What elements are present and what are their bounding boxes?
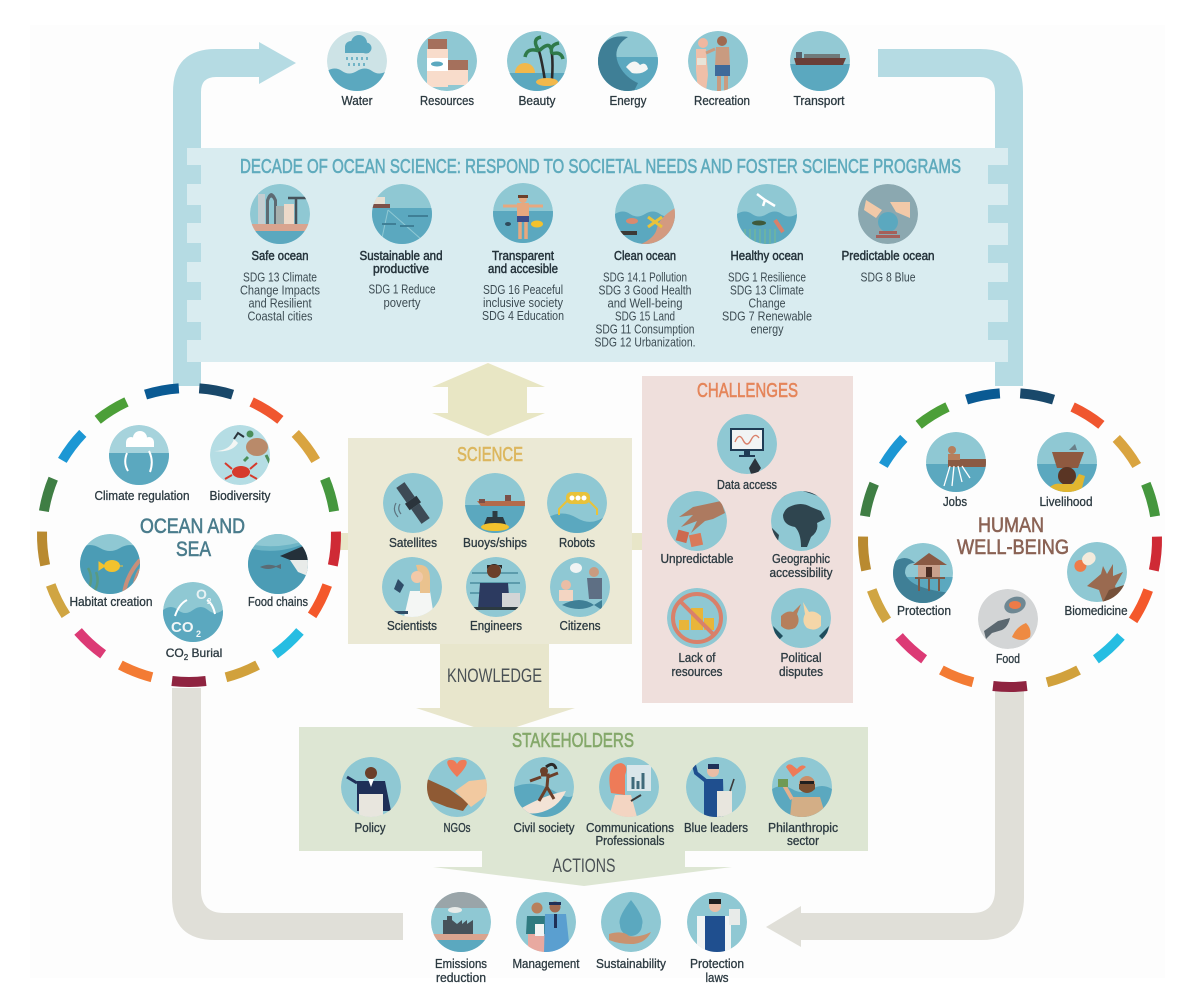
item: safe ocean: Change Impacts — [240, 284, 320, 298]
item: transparent and accessible: SDG 16 Peaceful — [483, 283, 563, 297]
connector: science to challenges — [630, 533, 644, 550]
item: recreation — [688, 31, 750, 108]
arrow: blue loop from benefits down to human well-being — [878, 49, 1023, 386]
item: transport — [790, 31, 850, 108]
item: water — [327, 31, 387, 108]
item: predictable ocean — [842, 184, 935, 284]
item: lack of resources: resources — [672, 665, 722, 679]
item: CO2 burial: 2 — [184, 653, 189, 662]
heading: ocean and sea: OCEAN AND — [140, 515, 245, 538]
item: sustainability — [596, 892, 667, 971]
item: policy — [341, 757, 401, 835]
item: policy: Policy — [354, 821, 386, 835]
item: philanthropic sector: Philanthropic — [768, 821, 838, 835]
arrow: blue loop from ocean up to societal benefits — [173, 42, 296, 386]
item: scientists — [382, 557, 442, 633]
heading: human well-being: HUMAN — [978, 514, 1044, 537]
arrow: grey loop from actions back to ocean — [172, 688, 403, 940]
item: predictable ocean: Predictable ocean — [842, 249, 935, 263]
item: clean ocean: SDG 12 Urbanization. — [594, 336, 696, 350]
item: habitat creation — [70, 534, 153, 609]
item: management — [512, 892, 580, 971]
item: satellites — [383, 473, 443, 550]
item: political disputes — [771, 588, 831, 679]
item: communications professionals: Professionals — [596, 834, 664, 848]
item: clean ocean — [594, 184, 696, 350]
item: food chains: Food chains — [248, 595, 308, 609]
item: water: Water — [342, 94, 372, 108]
label: actions: ACTIONS — [552, 856, 616, 877]
item: safe ocean: SDG 13 Climate — [243, 270, 317, 284]
item: transparent and accessible — [482, 183, 564, 323]
item: protection: Protection — [897, 604, 951, 618]
item: energy: Energy — [610, 94, 647, 108]
item: robots: Robots — [559, 536, 595, 550]
item: biomedicine: Biomedicine — [1064, 604, 1128, 618]
item: climate regulation — [94, 425, 190, 503]
panel: science — [348, 438, 632, 644]
heading: ocean and sea: SEA — [176, 538, 211, 561]
item: sustainable and productive — [360, 184, 443, 310]
item: citizens: Citizens — [560, 619, 600, 633]
item: clean ocean: Clean ocean — [614, 249, 676, 263]
item: CO2 burial: CO — [166, 646, 184, 660]
heading: human well-being — [957, 514, 1069, 559]
heading: stakeholders: STAKEHOLDERS — [512, 730, 634, 752]
item: engineers: Engineers — [470, 619, 522, 633]
item: livelihood — [1037, 432, 1097, 509]
arrow: grey loop from well-being to actions — [766, 690, 1024, 947]
item: buoys/ships: Buoys/ships — [463, 536, 527, 550]
panel: human well-being — [802, 332, 1196, 748]
item: transparent and accessible: and accesible — [488, 262, 558, 276]
item: management: Management — [512, 957, 580, 971]
item: biodiversity — [210, 425, 271, 503]
item: predictable ocean: SDG 8 Blue — [860, 270, 916, 284]
item: geographic accessibility — [770, 491, 833, 580]
item: clean ocean: SDG 15 Land — [615, 310, 675, 324]
item: CO2 burial: O — [196, 586, 207, 602]
item: geographic accessibility: Geographic — [772, 552, 830, 566]
item: clean ocean: SDG 3 Good Health — [598, 284, 692, 298]
item: healthy ocean: Healthy ocean — [730, 249, 804, 263]
item: beauty — [507, 31, 567, 108]
heading: challenges: CHALLENGES — [697, 380, 798, 402]
item: robots — [547, 473, 607, 550]
item: protection laws: Protection — [690, 957, 744, 971]
label: knowledge: KNOWLEDGE — [447, 666, 542, 687]
item: philanthropic sector: sector — [787, 834, 819, 848]
item: healthy ocean: SDG 7 Renewable — [722, 310, 812, 324]
item: transparent and accessible: inclusive society — [483, 296, 564, 310]
item: emissions reduction: reduction — [436, 971, 486, 985]
heading: ocean and sea — [140, 515, 245, 561]
item: beauty: Beauty — [518, 94, 556, 108]
item: safe ocean: Safe ocean — [252, 249, 309, 263]
item: NGOs: NGOs — [444, 821, 470, 835]
item: satellites: Satellites — [389, 536, 437, 550]
item: lack of resources: Lack of — [678, 651, 716, 665]
arrow: science double arrow — [432, 363, 545, 436]
item: biomedicine — [1064, 542, 1128, 618]
item: data access: Data access — [717, 478, 777, 492]
item: healthy ocean — [722, 184, 812, 336]
panel: challenges — [642, 376, 853, 703]
item: biodiversity: Biodiversity — [210, 489, 271, 503]
arrow: actions — [433, 850, 732, 886]
item: resources: Resources — [420, 94, 474, 108]
item: recreation: Recreation — [694, 94, 750, 108]
heading: human well-being: WELL-BEING — [957, 536, 1069, 559]
item: lack of resources — [667, 588, 727, 679]
item: healthy ocean: energy — [750, 322, 784, 336]
item: protection laws: laws — [706, 971, 728, 985]
item row: actions — [431, 892, 747, 985]
item: CO2 burial: 2 — [207, 597, 212, 606]
item: jobs — [926, 432, 986, 509]
item: food chains — [248, 534, 308, 609]
item: clean ocean: and Well-being — [608, 296, 683, 310]
item: transparent and accessible: Transparent — [492, 249, 554, 263]
item: clean ocean: SDG 14.1 Pollution — [603, 270, 687, 284]
item: sustainability: Sustainability — [596, 957, 667, 971]
item: protection laws — [687, 892, 747, 985]
arrow: knowledge — [416, 640, 575, 734]
item: energy — [598, 31, 658, 108]
item: buoys/ships — [463, 473, 527, 550]
item: unpredictable: Unpredictable — [660, 552, 734, 566]
item: NGOs — [427, 757, 487, 835]
item: safe ocean — [240, 184, 320, 324]
item: data access — [717, 414, 777, 492]
item: philanthropic sector — [768, 757, 838, 848]
item: habitat creation: Habitat creation — [70, 595, 153, 609]
item: CO2 burial: CO — [171, 619, 194, 636]
item: healthy ocean: Change — [748, 296, 786, 310]
item: transparent and accessible: SDG 4 Education — [482, 309, 564, 323]
item: jobs: Jobs — [943, 495, 967, 509]
item: sustainable and productive: SDG 1 Reduce — [368, 282, 436, 296]
item: emissions reduction — [431, 892, 491, 985]
item: safe ocean: Coastal cities — [248, 310, 312, 324]
item: engineers — [466, 557, 526, 633]
item: food — [978, 589, 1038, 666]
item: civil society: Civil society — [514, 821, 575, 835]
item: sustainable and productive: productive — [373, 262, 429, 276]
heading: science: SCIENCE — [457, 444, 523, 466]
connector: ocean to science — [340, 533, 350, 550]
item: communications professionals — [586, 757, 674, 848]
item: CO2 burial — [163, 582, 223, 662]
item: scientists: Scientists — [387, 619, 437, 633]
item: CO2 burial: 2 — [196, 629, 201, 639]
item: safe ocean: and Resilient — [248, 296, 312, 310]
item: healthy ocean: SDG 13 Climate — [730, 284, 804, 298]
panel: ocean and sea — [37, 383, 341, 687]
item: unpredictable — [660, 491, 734, 566]
item: emissions reduction: Emissions — [435, 957, 487, 971]
item: communications professionals: Communications — [586, 821, 674, 835]
item row: societal benefits — [327, 31, 850, 108]
heading: decade of ocean science: DECADE OF OCEAN SCIENCE: RESPOND TO SOCIETAL NEEDS AND FOSTER SCIENCE PROGRAMS — [240, 156, 961, 178]
item: geographic accessibility: accessibility — [770, 566, 833, 580]
item: civil society — [514, 757, 575, 835]
item: protection — [893, 543, 953, 618]
item: blue leaders — [684, 757, 748, 835]
item: sustainable and productive: Sustainable and — [360, 249, 443, 263]
item: food: Food — [996, 652, 1020, 666]
item: sustainable and productive: poverty — [384, 296, 421, 310]
item: political disputes: Political — [780, 651, 822, 665]
item: CO2 burial: Burial — [188, 646, 222, 660]
item: healthy ocean: SDG 1 Resilience — [728, 270, 806, 284]
item: clean ocean: SDG 11 Consumption — [596, 322, 695, 336]
item: blue leaders: Blue leaders — [684, 821, 748, 835]
item: resources — [417, 31, 477, 108]
panel: decade of ocean science — [187, 148, 1008, 362]
item: climate regulation: Climate regulation — [94, 489, 190, 503]
item: livelihood: Livelihood — [1040, 495, 1093, 509]
panel: stakeholders — [299, 727, 868, 851]
item: citizens — [550, 557, 610, 633]
item: transport: Transport — [794, 94, 845, 108]
item: political disputes: disputes — [779, 665, 823, 679]
